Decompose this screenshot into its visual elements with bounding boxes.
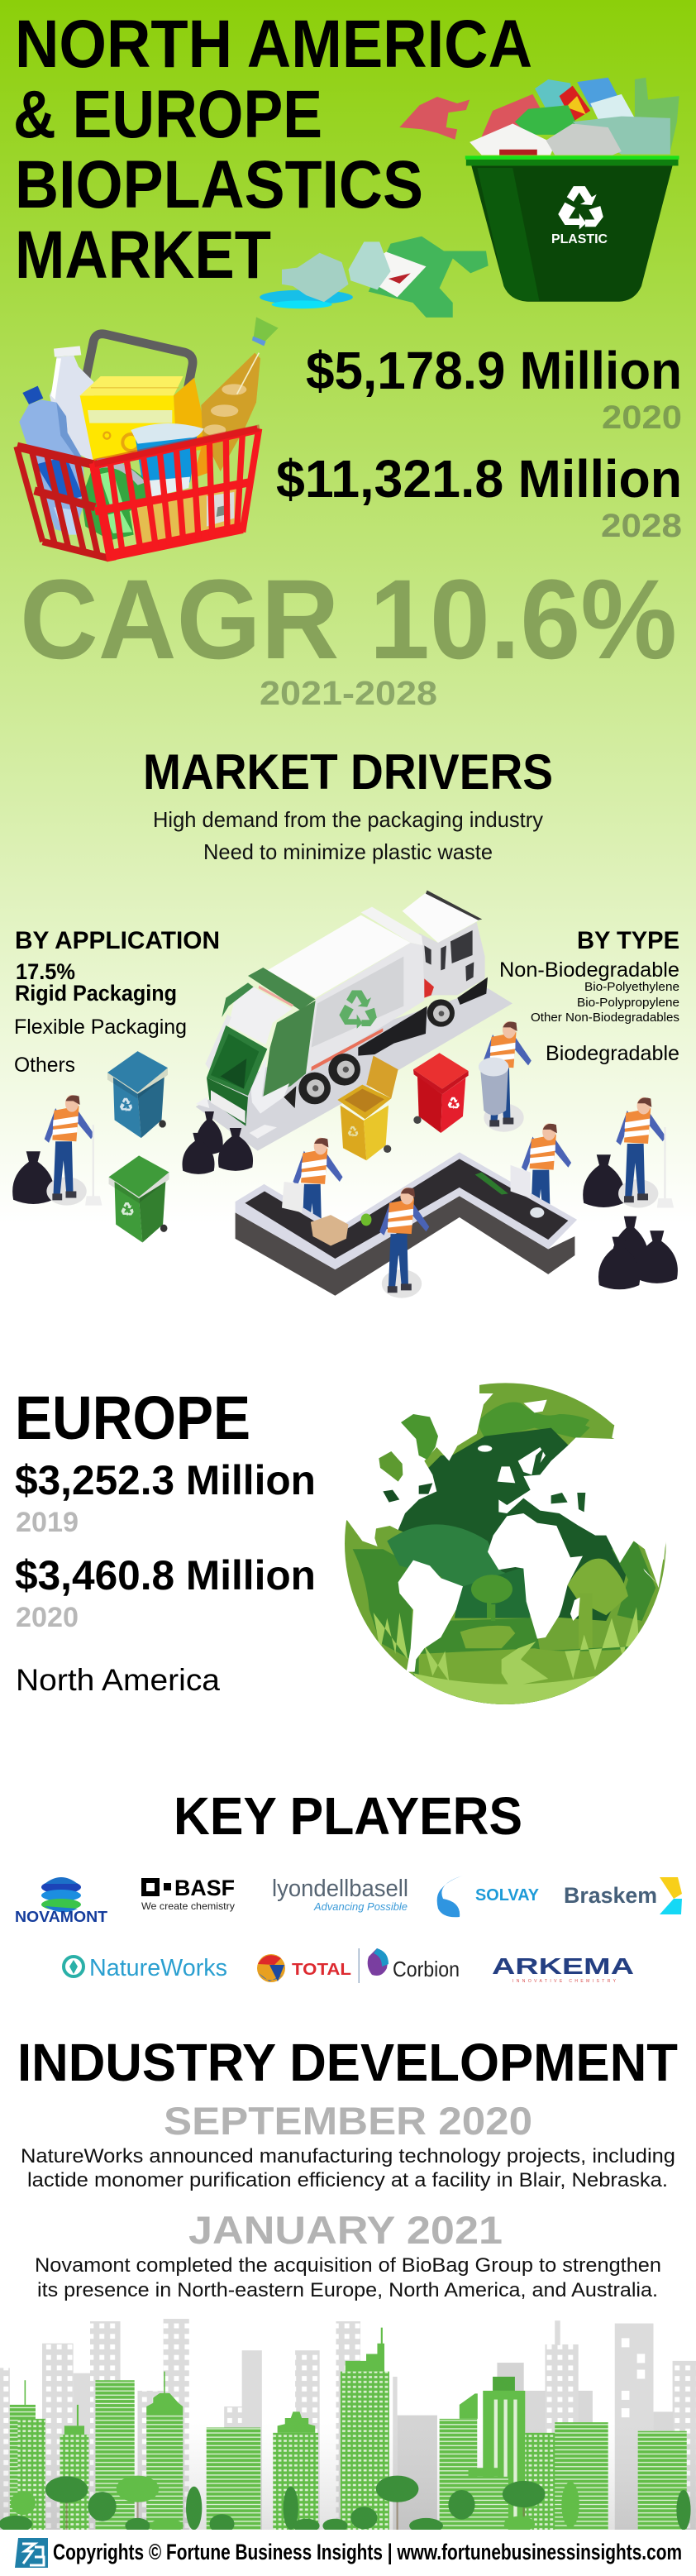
- green city skyline: [0, 2319, 696, 2534]
- value 2028: $11,321.8 Million: [276, 449, 682, 509]
- market drivers: [143, 744, 553, 864]
- icon: paper-cut globe: [345, 1383, 666, 1704]
- value 2020: 2020: [602, 399, 682, 436]
- logo: BASF: [141, 1876, 235, 1912]
- by application list: Rigid Packaging: [15, 981, 177, 1006]
- icon: shopping basket with plastic goods: [17, 317, 279, 561]
- logo: Novamont: NOVAMONT: [15, 1909, 107, 1925]
- by type list: [499, 927, 679, 1065]
- by application list: Others: [14, 1054, 75, 1077]
- icon: garbage truck with road, red and yellow bins: [182, 891, 512, 1174]
- icon: blue bin: [107, 1051, 168, 1138]
- development: January 2021: JANUARY 2021: [188, 2208, 503, 2252]
- development: September 2020: SEPTEMBER 2020: [164, 2099, 532, 2143]
- icon: worker with broom right: [616, 1097, 674, 1208]
- value 2020: $5,178.9 Million: [306, 341, 682, 400]
- logo: Solvay: SOLVAY: [475, 1886, 540, 1905]
- icon: workers behind conveyor: [293, 1021, 571, 1248]
- logo: Novamont: [15, 1877, 107, 1925]
- key players heading: KEY PLAYERS: [174, 1786, 522, 1846]
- logo: Braskem: Braskem: [564, 1883, 657, 1908]
- icon: Fortune Business Insights logo: [15, 2538, 48, 2568]
- value 2020: [306, 341, 682, 436]
- logo: LyondellBasell: [272, 1876, 408, 1913]
- icon: grey trash can: [479, 1058, 508, 1116]
- logo: Arkema: INNOVATIVE CHEMISTRY: [512, 1979, 617, 1984]
- by application list: [14, 927, 220, 1077]
- by application list: Flexible Packaging: [14, 1016, 187, 1039]
- trees: [0, 2476, 691, 2534]
- title: BIOPLASTICS: [15, 147, 423, 222]
- logo: Braskem: [564, 1877, 682, 1914]
- divider line: [359, 1948, 360, 1983]
- title: MARKET: [15, 217, 271, 293]
- by type list: Biodegradable: [546, 1042, 679, 1065]
- logo: Corbion: Corbion: [393, 1957, 460, 1981]
- logo: BASF: We create chemistry: [141, 1900, 235, 1912]
- logo: LyondellBasell: Advancing Possible: [313, 1900, 408, 1913]
- Europe stats: [15, 1384, 316, 1697]
- market values: [276, 341, 682, 544]
- bin label: PLASTIC: [551, 232, 608, 246]
- logo: NatureWorks: NatureWorks: [89, 1955, 227, 1981]
- title: & EUROPE: [13, 77, 322, 152]
- logo: Total: [257, 1954, 351, 1982]
- Europe stats: North America: [16, 1663, 220, 1697]
- title: NORTH AMERICA: [15, 7, 532, 82]
- conveyor belt: [236, 1152, 577, 1296]
- by type list: Bio-Polypropylene: [577, 996, 679, 1010]
- CAGR figure: CAGR 10.6%: [20, 557, 677, 683]
- icon: green bin: [109, 1155, 169, 1242]
- CAGR figure: 2021-2028: [260, 674, 437, 712]
- logo: Total: TOTAL: [292, 1961, 351, 1979]
- market drivers: High demand from the packaging industry: [153, 807, 543, 832]
- footer: [0, 2530, 696, 2576]
- logo: BASF: BASF: [174, 1876, 235, 1900]
- by type list: Other Non-Biodegradables: [531, 1011, 679, 1025]
- development: September 2020: NatureWorks announced manufacturing technology projects, including: [21, 2145, 675, 2167]
- by type list: BY TYPE: [577, 927, 679, 954]
- icon: far bag piles: [12, 1151, 678, 1289]
- grey background buildings: [0, 2319, 696, 2530]
- value 2028: [276, 449, 682, 544]
- green buildings: [10, 2328, 687, 2530]
- development: January 2021: its presence in North-eastern Europe, North America, and Australia.: [37, 2279, 658, 2301]
- logo: LyondellBasell: lyondellbasell: [272, 1876, 408, 1902]
- Europe stats: $3,460.8 Million: [15, 1552, 316, 1599]
- market drivers: MARKET DRIVERS: [143, 744, 553, 800]
- Europe stats: 2019: [16, 1507, 79, 1538]
- page background gradient: [0, 0, 696, 1224]
- development: January 2021: Novamont completed the acquisition of BioBag Group to strengthen: [35, 2254, 661, 2277]
- market drivers: Need to minimize plastic waste: [203, 839, 493, 864]
- value 2028: 2028: [601, 508, 682, 544]
- logo: Arkema: ARKEMA: [492, 1953, 634, 1979]
- logo: Arkema: [492, 1953, 634, 1984]
- development: September 2020: lactide monomer purification efficiency at a facility in Blair, Nebraska.: [27, 2169, 668, 2191]
- development: January 2021: [35, 2208, 661, 2301]
- by application list: 17.5%: [16, 959, 75, 984]
- by type list: Bio-Polyethylene: [584, 980, 679, 994]
- by application list: BY APPLICATION: [15, 927, 220, 954]
- Europe stats: EUROPE: [15, 1384, 250, 1452]
- title: [13, 7, 532, 293]
- waste sorting illustration: [12, 1021, 678, 1298]
- Europe stats: $3,252.3 Million: [15, 1457, 316, 1503]
- icon: plastic recycling bin with waste: [260, 78, 679, 318]
- icon: worker with broom left: [45, 1095, 102, 1206]
- industry development heading: INDUSTRY DEVELOPMENT: [17, 2033, 678, 2092]
- logo: Corbion: [368, 1948, 460, 1981]
- by type list: Non-Biodegradable: [499, 958, 679, 982]
- development: September 2020: [21, 2099, 675, 2191]
- icon: sorting worker: [379, 1188, 429, 1298]
- Europe stats: 2020: [16, 1602, 79, 1633]
- logo: Solvay: [437, 1876, 540, 1917]
